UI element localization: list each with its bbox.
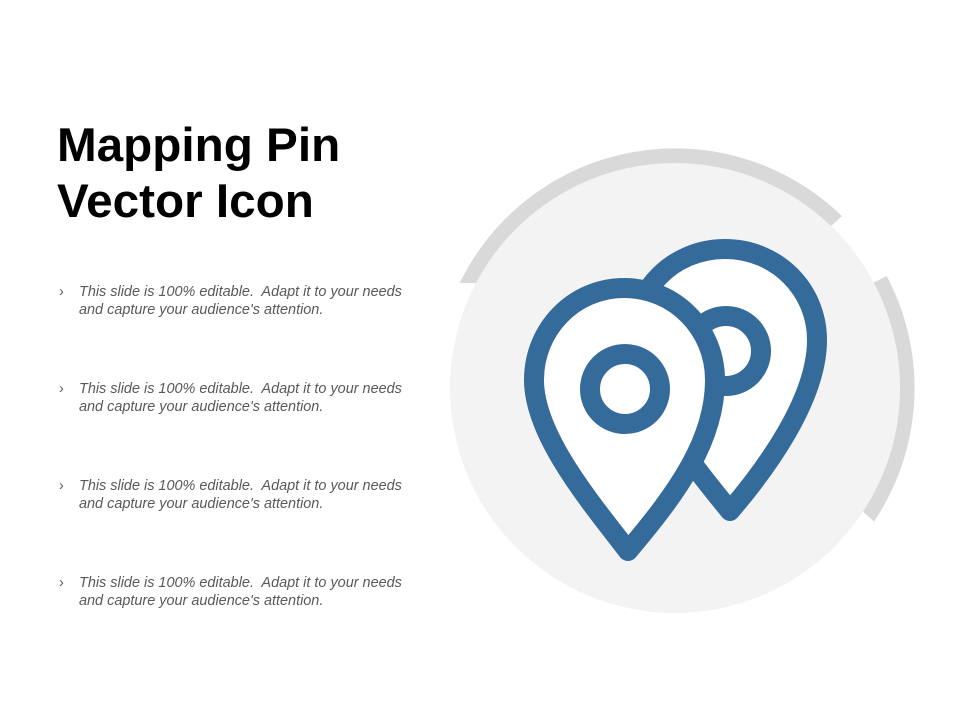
text block: bullet 2: This slide is 100% editable. Adapt it to your needs and capture your audience's attention. [79,381,402,415]
text block: bullet 1: › [59,284,64,300]
icon: front map pin [534,288,715,551]
text block: bullet 4: This slide is 100% editable. Adapt it to your needs and capture your audience's attention. [79,575,402,609]
text block: bullet 3: › [59,478,64,494]
icon: rear map pin [633,249,817,511]
title: Mapping Pin [57,119,340,172]
text block: bullet 1: This slide is 100% editable. Adapt it to your needs and capture your audience's attention. [79,284,402,318]
ring arc: top [460,148,842,283]
title [57,119,340,228]
title: Vector Icon [57,175,314,228]
background circle [450,163,900,613]
text block: bullet 3: This slide is 100% editable. Adapt it to your needs and capture your audience's attention. [79,478,402,512]
ring arc: right [863,276,915,522]
text block: bullet 4: › [59,575,64,591]
text block: bullet 2: › [59,381,64,397]
